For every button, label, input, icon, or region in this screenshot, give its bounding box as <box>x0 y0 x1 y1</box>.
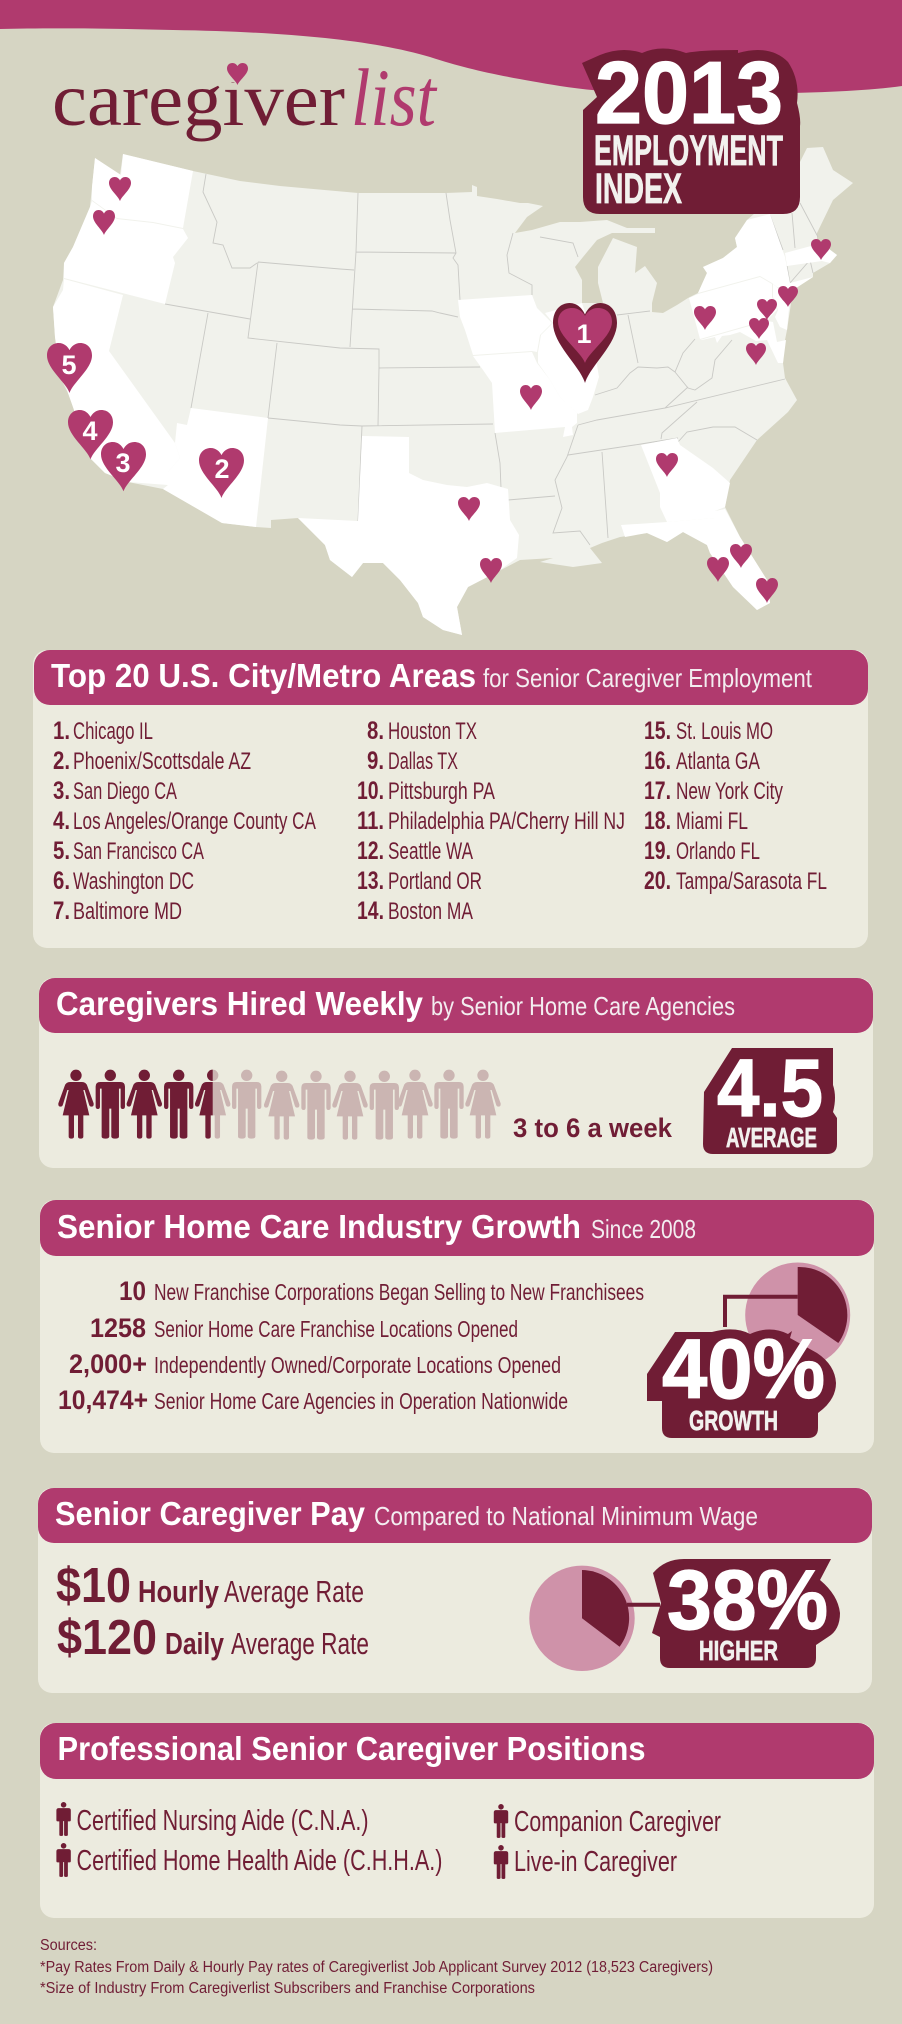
header: industry growth: Since 2008 <box>591 1214 696 1244</box>
heart: Philadelphia <box>757 299 777 320</box>
hourly rate: Average Rate <box>224 1574 364 1609</box>
map: state borders <box>165 174 818 545</box>
panel: top 20 metro areas <box>33 650 868 948</box>
list column 2: 13. <box>357 867 384 895</box>
list column 1: San Diego CA <box>73 778 177 805</box>
header: positions <box>40 1723 874 1779</box>
list column 3: St. Louis MO <box>676 718 773 745</box>
heart 4: Los Angeles <box>68 410 113 459</box>
heart: Boston <box>811 239 831 260</box>
list column 2: 8. <box>367 717 384 745</box>
list column 2: 11. <box>357 807 384 835</box>
daily rate: Average Rate <box>231 1626 369 1661</box>
growth stat rows: Independently Owned/Corporate Locations Opened <box>154 1352 561 1378</box>
list column 3: Tampa/Sarasota FL <box>676 868 827 895</box>
US map <box>53 147 853 635</box>
header: caregiver pay <box>38 1488 872 1543</box>
list column 3 <box>644 717 827 895</box>
header: caregivers hired: Caregivers Hired Weekly <box>56 985 424 1022</box>
heart: Atlanta <box>656 453 678 477</box>
heart: Baltimore <box>749 318 769 339</box>
badge: 38% higher: 38% <box>667 1553 828 1647</box>
list column 2: Houston TX <box>388 718 477 745</box>
list column 1: Los Angeles/Orange County CA <box>73 808 316 835</box>
panel: senior caregiver pay <box>38 1488 872 1693</box>
state: Massachusetts <box>785 240 837 266</box>
list column 2: Portland OR <box>388 868 482 895</box>
position: companion caregiver <box>494 1804 721 1838</box>
position: C.N.A. <box>56 1802 368 1837</box>
list column 1: Washington DC <box>73 868 194 895</box>
header: caregivers hired: by Senior Home Care Agencies <box>431 991 735 1021</box>
position: C.H.H.A.: Certified Home Health Aide (C.H.H.A.) <box>76 1845 442 1877</box>
heart 1: Chicago <box>553 303 617 383</box>
list column 3: New York City <box>676 778 783 805</box>
list column 3: 18. <box>644 807 671 835</box>
header: industry growth: Senior Home Care Industry Growth <box>57 1208 581 1245</box>
heart: Pittsburgh <box>694 306 716 330</box>
position: live-in caregiver: Live-in Caregiver <box>514 1846 677 1878</box>
panel: senior home care industry growth <box>40 1200 874 1453</box>
growth stat rows: Senior Home Care Agencies in Operation Nationwide <box>154 1388 568 1414</box>
list column 1: 2. <box>53 747 70 775</box>
heart: Tampa <box>707 557 729 582</box>
heart: Seattle <box>109 177 131 201</box>
growth stat rows <box>58 1276 644 1415</box>
pictogram: thirteen people, 4.5 filled <box>58 1070 501 1140</box>
heart 5: San Francisco: 5 <box>61 350 77 380</box>
hourly rate: $10 <box>56 1559 131 1613</box>
state: Texas <box>298 436 519 635</box>
list column 2: Pittsburgh PA <box>388 778 495 805</box>
heart 5: San Francisco <box>47 343 92 393</box>
list column 1: 7. <box>53 897 70 925</box>
state: Arizona <box>163 408 268 527</box>
list column 2: Philadelphia PA/Cherry Hill NJ <box>388 808 625 835</box>
daily rate: Daily <box>165 1626 225 1661</box>
panel: professional senior caregiver positions <box>40 1723 874 1918</box>
badge: 4.5 average <box>703 1043 837 1154</box>
logo: caregiverlist: caregiver <box>52 58 345 142</box>
growth stat rows: 10,474+ <box>58 1385 148 1415</box>
pie chart: 38 percent <box>529 1566 660 1671</box>
list column 2: 12. <box>357 837 384 865</box>
heart 2: Phoenix: 2 <box>214 454 230 484</box>
list column 3: 15. <box>644 717 671 745</box>
list column 1: 1. <box>53 717 70 745</box>
header: caregiver pay: Senior Caregiver Pay <box>55 1495 366 1532</box>
badge: 4.5 average: 4.5 <box>717 1043 823 1134</box>
list column 1 <box>53 717 316 925</box>
list column 1: 3. <box>53 777 70 805</box>
panel: caregivers hired weekly <box>39 978 873 1168</box>
list column 1: 4. <box>53 807 70 835</box>
growth stat rows: New Franchise Corporations Began Selling to New Franchisees <box>154 1279 644 1305</box>
state: Oregon <box>64 201 188 304</box>
heart 1: Chicago: 1 <box>576 319 592 349</box>
hourly rate: Hourly <box>138 1574 220 1609</box>
list column 3: 17. <box>644 777 671 805</box>
logo: caregiverlist <box>52 52 438 143</box>
badge: 2013 employment index: INDEX <box>595 165 682 213</box>
list column 2: 14. <box>357 897 384 925</box>
header: top 20: Top 20 U.S. City/Metro Areas <box>51 657 476 694</box>
list column 1: Baltimore MD <box>73 898 182 925</box>
list column 3: 19. <box>644 837 671 865</box>
heart: Portland <box>93 210 115 235</box>
heart: Houston <box>480 558 502 583</box>
logo: caregiverlist: list <box>351 52 438 143</box>
header: top 20 <box>34 650 868 705</box>
list column 2: Dallas TX <box>388 748 458 775</box>
growth stat rows: Senior Home Care Franchise Locations Opened <box>154 1316 518 1342</box>
growth stat rows: 10 <box>119 1276 146 1306</box>
state: California <box>53 279 180 485</box>
state: Washington <box>92 154 193 228</box>
header: caregiver pay: Compared to National Minimum Wage <box>374 1501 758 1531</box>
badge: 2013 employment index <box>582 43 800 214</box>
growth stat rows: 2,000+ <box>69 1349 147 1379</box>
heart: Washington DC <box>746 343 766 365</box>
list column 3: 16. <box>644 747 671 775</box>
growth stat rows: 1258 <box>90 1313 146 1343</box>
badge: 2013 employment index: 2013 <box>595 43 783 142</box>
header: top 20: for Senior Caregiver Employment <box>483 663 813 693</box>
position: C.H.H.A. <box>56 1843 442 1877</box>
badge: 2013 employment index: EMPLOYMENT <box>594 127 783 175</box>
heart: Dallas <box>458 497 480 521</box>
sources: Sources: <box>40 1937 97 1954</box>
state: Iowa <box>458 295 552 355</box>
sources: *Pay Rates From Daily & Hourly Pay rates of Caregiverlist Job Applicant Survey 2012 (18,523 Caregivers) <box>40 1959 713 1976</box>
sources <box>40 1937 713 1997</box>
list column 2: Seattle WA <box>388 838 473 865</box>
state: New Jersey <box>773 284 790 330</box>
heart 3: San Diego: 3 <box>115 448 131 478</box>
state: New York <box>698 214 813 293</box>
state: Florida <box>621 509 770 610</box>
heart 4: Los Angeles: 4 <box>82 416 98 446</box>
header: positions: Professional Senior Caregiver Positions <box>58 1730 646 1767</box>
heart 3: San Diego <box>101 442 146 491</box>
header: industry growth <box>40 1200 874 1256</box>
list column 3: 20. <box>644 867 671 895</box>
heart: St. Louis <box>520 385 542 410</box>
list column 2: Boston MA <box>388 898 473 925</box>
list column 2 <box>357 717 625 925</box>
sources: *Size of Industry From Caregiverlist Subscribers and Franchise Corporations <box>40 1980 535 1997</box>
heart 2: Phoenix <box>199 448 244 498</box>
top wave banner <box>0 0 902 94</box>
list column 1: 5. <box>53 837 70 865</box>
state: Missouri <box>473 352 577 437</box>
position: companion caregiver: Companion Caregiver <box>514 1806 721 1838</box>
badge: 4.5 average: AVERAGE <box>726 1122 817 1153</box>
list column 3: Miami FL <box>676 808 748 835</box>
list column 1: 6. <box>53 867 70 895</box>
badge: 40% growth: GROWTH <box>689 1405 778 1436</box>
map: all states base <box>53 147 853 635</box>
state: Illinois <box>538 303 599 414</box>
list column 1: Phoenix/Scottsdale AZ <box>73 748 251 775</box>
daily rate: $120 <box>57 1611 157 1665</box>
daily rate <box>57 1611 369 1665</box>
list column 1: Chicago IL <box>73 718 153 745</box>
state: Pennsylvania <box>689 277 777 339</box>
list column 2: 9. <box>367 747 384 775</box>
badge: 38% higher: HIGHER <box>699 1635 778 1666</box>
list column 2: 10. <box>357 777 384 805</box>
state: Maryland and Delaware <box>700 321 786 363</box>
pie chart: 40 percent <box>725 1262 850 1368</box>
heart: New York City <box>778 286 798 307</box>
list column 3: Orlando FL <box>676 838 760 865</box>
badge: 40% growth: 40% <box>662 1322 825 1416</box>
state: Georgia <box>641 438 730 522</box>
position: live-in caregiver <box>494 1845 677 1879</box>
list column 3: Atlanta GA <box>676 748 760 775</box>
position: C.N.A.: Certified Nursing Aide (C.N.A.) <box>76 1805 368 1837</box>
label: 3 to 6 a week: 3 to 6 a week <box>513 1113 673 1143</box>
heart: Miami <box>756 578 778 603</box>
header: caregivers hired <box>39 978 873 1033</box>
hourly rate <box>56 1559 364 1613</box>
heart: Orlando <box>730 544 752 568</box>
list column 1: San Francisco CA <box>73 838 204 865</box>
